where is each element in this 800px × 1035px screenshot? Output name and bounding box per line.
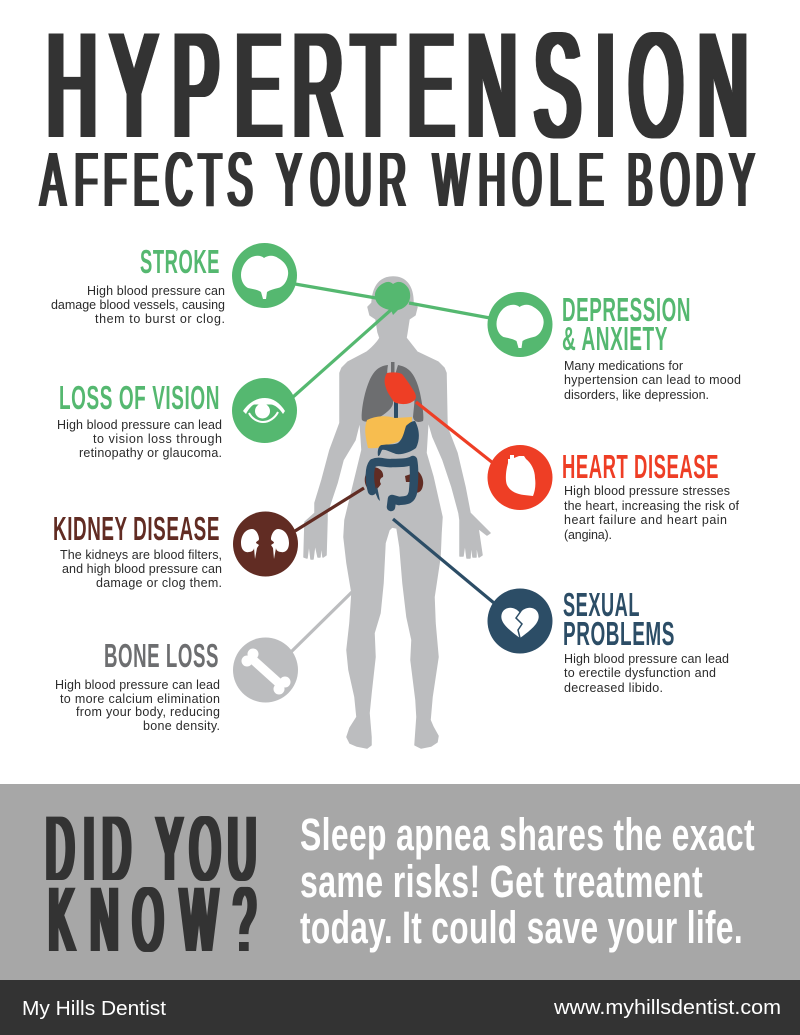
heading: did you know: KNOW? bbox=[49, 868, 255, 971]
icon: brain bbox=[232, 243, 297, 308]
text block: damage blood vessels, causing bbox=[51, 298, 225, 312]
body figure bbox=[304, 277, 490, 748]
footer bbox=[0, 980, 800, 1035]
text block: High blood pressure can bbox=[87, 284, 225, 298]
line: kidney bbox=[295, 488, 364, 531]
text block: bone density. bbox=[143, 719, 220, 733]
text block: them to burst or clog. bbox=[95, 312, 225, 326]
panel: did you know bbox=[0, 784, 800, 980]
text block: High blood pressure can lead bbox=[564, 652, 729, 666]
panel: depression and anxiety bbox=[488, 291, 741, 402]
icon: kidneys bbox=[233, 512, 298, 576]
panel: stroke bbox=[51, 243, 297, 326]
text block: Many medications for bbox=[564, 359, 683, 373]
text block bbox=[55, 678, 220, 733]
icon: heart bbox=[488, 445, 552, 510]
text block bbox=[564, 359, 741, 402]
panel: sexual problems bbox=[488, 586, 729, 695]
brain organ bbox=[375, 282, 410, 315]
heading: SEXUAL bbox=[563, 586, 640, 623]
heading: DEPRESSION bbox=[562, 291, 691, 328]
text block: from your body, reducing bbox=[76, 705, 220, 719]
heart organ bbox=[385, 372, 416, 404]
text block bbox=[564, 484, 740, 542]
line: depression bbox=[409, 303, 490, 318]
title bbox=[40, 2, 755, 223]
text block: to more calcium elimination bbox=[60, 692, 220, 706]
connector lines bbox=[291, 284, 494, 652]
panel: kidney disease bbox=[53, 510, 298, 590]
text block: the heart, increasing the risk of bbox=[564, 499, 740, 513]
line: bone bbox=[291, 592, 352, 652]
text block: heart failure and heart pain bbox=[564, 513, 727, 527]
text block: to vision loss through bbox=[93, 432, 222, 446]
lungs bbox=[362, 362, 423, 422]
footer url: www.myhillsdentist.com bbox=[553, 997, 781, 1019]
line: heart bbox=[416, 402, 493, 463]
heading: LOSS OF VISION bbox=[59, 379, 220, 416]
panel: loss of vision bbox=[57, 378, 297, 460]
text block bbox=[60, 548, 222, 590]
text block: disorders, like depression. bbox=[564, 388, 709, 402]
heading: STROKE bbox=[140, 243, 220, 280]
text block: to erectile dysfunction and bbox=[564, 666, 716, 680]
stomach and intestines bbox=[370, 421, 419, 507]
text block: retinopathy or glaucoma. bbox=[79, 446, 222, 460]
icon: bone bbox=[233, 638, 298, 702]
liver bbox=[365, 416, 412, 448]
text block bbox=[57, 418, 222, 460]
icon: broken heart bbox=[488, 588, 552, 654]
heading bbox=[562, 291, 691, 357]
silhouette bbox=[304, 277, 490, 748]
text block: damage or clog them. bbox=[96, 576, 222, 590]
icon: brain bbox=[488, 292, 552, 357]
heading: PROBLEMS bbox=[563, 615, 675, 652]
line: sexual bbox=[393, 519, 494, 603]
heading: did you know bbox=[46, 797, 256, 971]
text block: and high blood pressure can bbox=[62, 562, 222, 576]
heading: did you know: DID YOU bbox=[46, 797, 256, 900]
title line 1: HYPERTENSION bbox=[47, 2, 748, 169]
heading bbox=[563, 586, 675, 652]
text block bbox=[51, 284, 225, 326]
text block: High blood pressure stresses bbox=[564, 484, 730, 498]
text block: (angina). bbox=[564, 528, 612, 542]
heading: BONE LOSS bbox=[104, 637, 219, 674]
footer brand: My Hills Dentist bbox=[22, 998, 166, 1020]
heading: KIDNEY DISEASE bbox=[53, 510, 220, 547]
kidneys bbox=[365, 467, 423, 493]
line: vision bbox=[293, 309, 392, 397]
text block: High blood pressure can lead bbox=[57, 418, 222, 432]
line: stroke bbox=[295, 284, 376, 298]
panel: heart disease bbox=[488, 445, 740, 542]
icon: eye bbox=[232, 378, 297, 443]
panel: bone loss bbox=[55, 637, 298, 733]
heading: & ANXIETY bbox=[562, 320, 668, 357]
esophagus bbox=[394, 400, 398, 418]
text block bbox=[564, 652, 729, 695]
text block: The kidneys are blood filters, bbox=[60, 548, 222, 562]
title line 2: AFFECTS YOUR WHOLE BODY bbox=[40, 136, 755, 223]
callout text bbox=[300, 809, 755, 953]
text block: High blood pressure can lead bbox=[55, 678, 220, 692]
text block: hypertension can lead to mood bbox=[564, 373, 741, 387]
text block: decreased libido. bbox=[564, 681, 663, 695]
